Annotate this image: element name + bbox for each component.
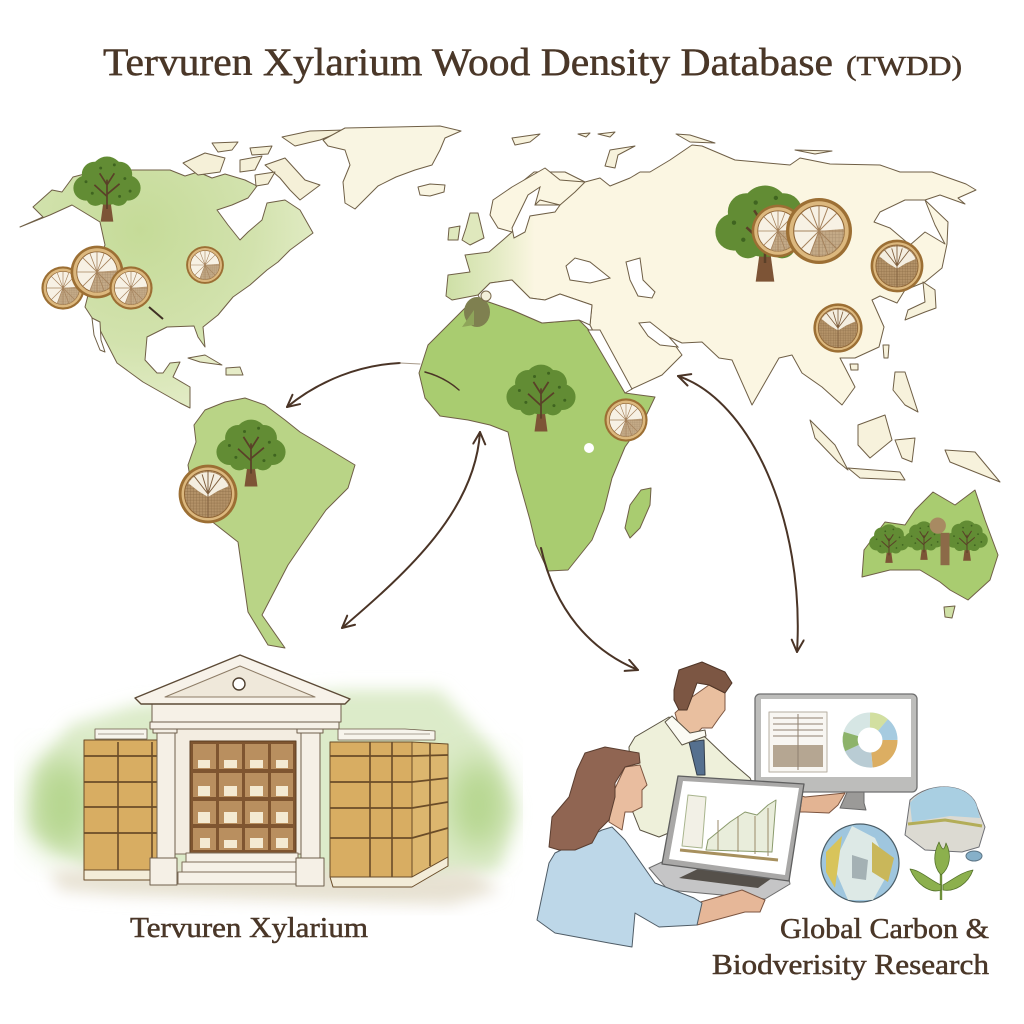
right column xyxy=(296,727,324,886)
cabinet labels xyxy=(95,729,435,740)
land: Southeast Asia and Pacific islands xyxy=(810,282,1000,482)
label: Global Carbon & Biodiversity Research: Global Carbon & xyxy=(780,914,989,945)
left column xyxy=(150,727,177,885)
wood disk: South America xyxy=(179,465,237,523)
land: Scandinavia xyxy=(490,168,585,232)
cloud xyxy=(905,787,985,861)
tree: North Africa small xyxy=(462,291,491,327)
land: Greenland xyxy=(323,126,461,209)
man collar xyxy=(665,716,706,745)
laptop xyxy=(649,776,804,899)
lake: Victoria xyxy=(584,443,594,453)
land: Iceland xyxy=(418,184,445,196)
arrow: Africa to research xyxy=(541,548,638,670)
land: Okhotsk and northeast Asia inlet xyxy=(874,200,945,245)
entablature xyxy=(150,704,341,729)
tree: Africa xyxy=(506,365,576,432)
monitor xyxy=(755,694,917,810)
land: British Isles xyxy=(462,213,484,245)
label: Global Carbon & Biodiversity Research: Biodverisity Research xyxy=(712,950,989,981)
land: Australia xyxy=(862,490,998,600)
wood disk: North America east xyxy=(186,246,224,284)
left storage cabinet xyxy=(84,740,158,880)
wood disk: East Asia xyxy=(871,240,923,292)
label: Global Carbon & Biodiversity Research xyxy=(712,914,989,981)
woman shirt xyxy=(537,827,702,947)
title: (TWDD) xyxy=(846,51,962,81)
land: Madagascar xyxy=(625,488,651,538)
land: Tasmania xyxy=(944,606,955,618)
wood disk: East Africa xyxy=(604,398,648,442)
wood disks: Central Asia xyxy=(752,198,852,264)
man hair xyxy=(674,662,732,710)
panel: researchers xyxy=(537,662,985,947)
man tie xyxy=(689,740,705,775)
plant xyxy=(910,842,973,900)
woman hand xyxy=(697,890,765,925)
land: Canadian Arctic islands xyxy=(183,130,345,200)
globe xyxy=(821,824,899,902)
laptop chart xyxy=(680,795,778,860)
tree: South America xyxy=(216,420,286,487)
man xyxy=(629,662,845,837)
land: South America xyxy=(188,398,355,648)
right storage cabinet xyxy=(330,742,448,887)
man shirt xyxy=(629,717,760,837)
portico wall xyxy=(172,726,302,854)
land: Arctic islands xyxy=(512,132,832,168)
land: Eurasia xyxy=(446,145,976,405)
woman xyxy=(537,747,765,947)
steps xyxy=(178,853,298,884)
trees: Australia xyxy=(869,518,988,565)
tree: North America xyxy=(73,156,141,222)
woman hair xyxy=(549,747,640,850)
man arm and hand xyxy=(800,793,845,813)
pediment xyxy=(135,655,350,704)
arrow: Africa to South America xyxy=(287,363,459,407)
tree: Asia xyxy=(715,186,815,282)
monitor donut chart xyxy=(850,720,890,760)
shelves xyxy=(190,741,296,853)
label: Tervuren Xylarium: Tervuren Xylarium xyxy=(130,913,368,944)
woman face xyxy=(609,765,647,830)
arrow: Asia to research xyxy=(678,376,798,652)
watercolor background xyxy=(30,690,515,905)
wood disks: North America west xyxy=(41,246,163,319)
world map xyxy=(20,126,1000,648)
wood disk: China xyxy=(813,303,863,353)
arrow: Africa to Xylarium xyxy=(342,432,480,628)
man neck and face xyxy=(675,685,725,735)
land: Baja California xyxy=(92,318,105,352)
monitor table xyxy=(769,712,827,772)
title: Tervuren Xylarium Wood Density Database xyxy=(103,41,833,84)
land: Caribbean islands xyxy=(188,355,243,375)
land: North America xyxy=(20,170,313,408)
panel: Tervuren Xylarium building xyxy=(30,655,515,905)
inland water: Black Sea, Caspian, Baltic, Mediterranean, Red Sea, Persian Gulf xyxy=(478,187,678,393)
land: Africa xyxy=(419,299,655,571)
